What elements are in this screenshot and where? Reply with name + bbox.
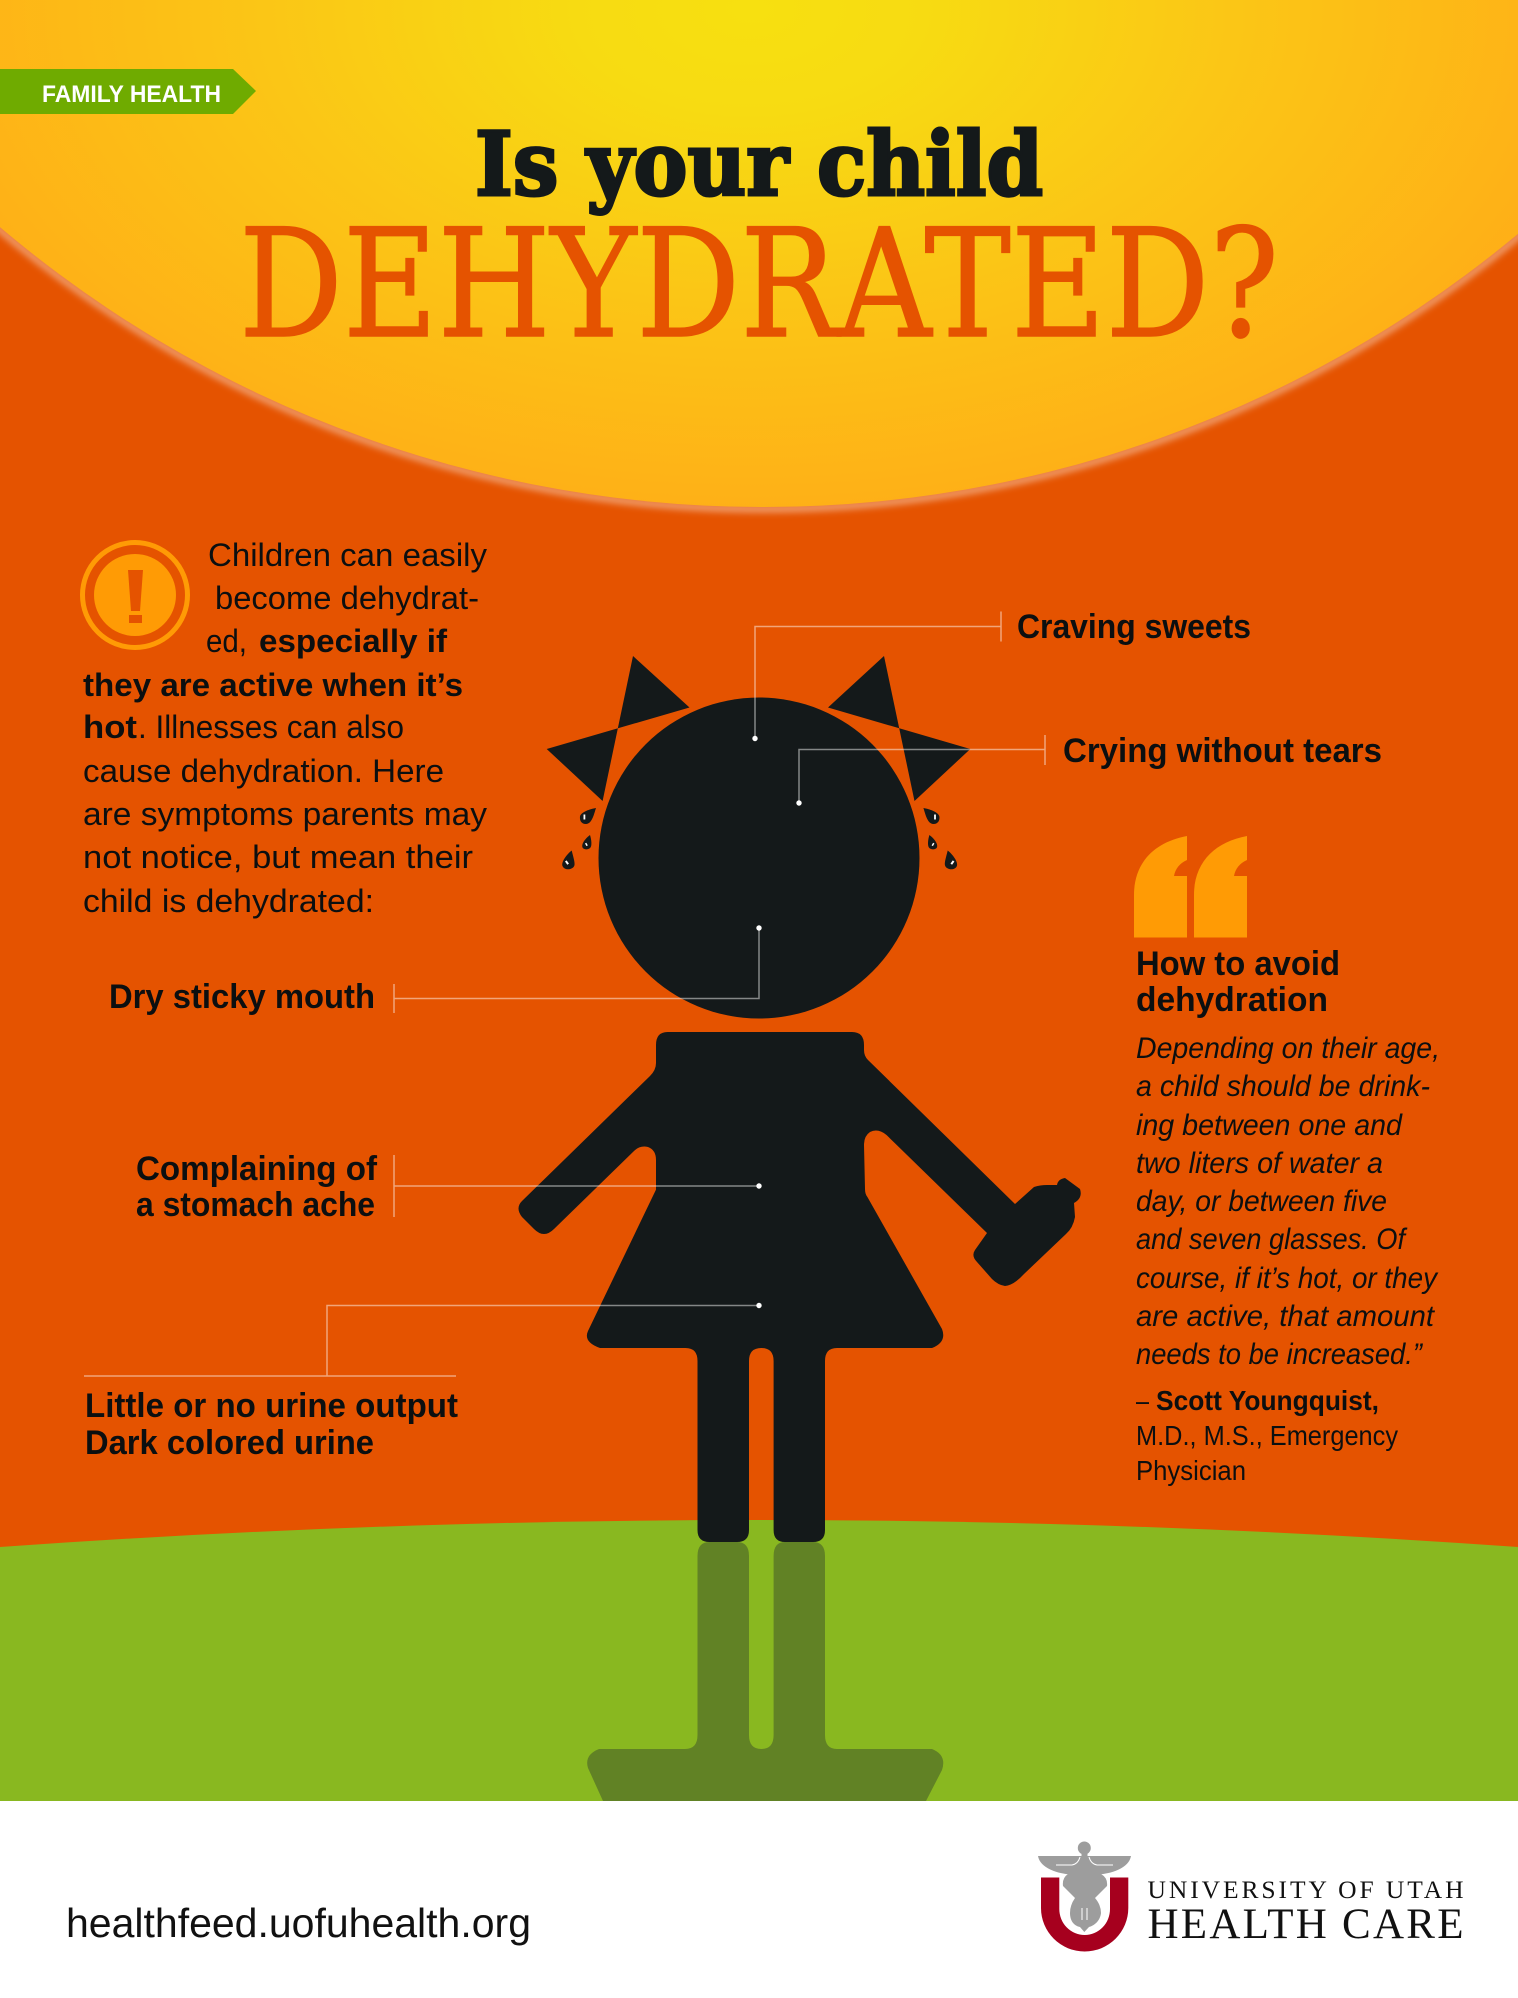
quote body — [1136, 1032, 1440, 1371]
icon: red U — [1041, 1878, 1128, 1952]
head — [598, 698, 920, 1018]
hair bow left — [547, 656, 690, 801]
callout: stomach ache: Complaining of — [136, 1150, 378, 1188]
tear drops left — [562, 808, 596, 869]
icon: caduceus — [1038, 1842, 1131, 1932]
quote attribution: M.D., M.S., Emergency — [1136, 1420, 1398, 1451]
green ground — [0, 1520, 1518, 1801]
sun glow edge — [0, 0, 1518, 509]
callout: crying without tears — [796, 732, 1382, 806]
intro text: cause dehydration. Here — [83, 753, 444, 789]
quote body: Depending on their age, — [1136, 1032, 1440, 1065]
callout: urine: Dark colored urine — [85, 1424, 374, 1462]
title: Is your child — [475, 112, 1043, 216]
callout: craving sweets — [752, 608, 1251, 741]
callout: dry sticky mouth — [109, 925, 762, 1016]
quote body: course, if it’s hot, or they — [1136, 1262, 1439, 1295]
quote heading — [1136, 945, 1340, 1019]
quote attribution — [1136, 1385, 1398, 1486]
quote body: two liters of water a — [1136, 1147, 1383, 1180]
quote heading: dehydration — [1136, 981, 1328, 1019]
intro text — [83, 537, 487, 919]
logo: university of utah health care — [1038, 1842, 1464, 1952]
quote heading: How to avoid — [1136, 945, 1340, 983]
quote attribution: – — [1136, 1385, 1149, 1416]
intro text: not notice, but mean their — [83, 839, 473, 875]
title — [239, 112, 1279, 372]
icon: warning — [82, 542, 188, 648]
banner: family health: FAMILY HEALTH — [42, 81, 221, 108]
intro panel — [82, 537, 487, 919]
panel: how to avoid dehydration — [1134, 836, 1440, 1486]
intro text: become dehydrat- — [215, 580, 479, 616]
quote body: needs to be increased.” — [1136, 1338, 1424, 1371]
intro text: hot — [83, 709, 137, 745]
callout: urine — [84, 1303, 762, 1462]
website url: healthfeed.uofuhealth.org — [66, 1900, 531, 1946]
tear drops right — [923, 808, 957, 869]
intro text: especially if — [259, 623, 447, 659]
intro text: Children can easily — [208, 537, 487, 573]
logo text: UNIVERSITY OF UTAH — [1148, 1875, 1464, 1904]
intro text: . Illnesses can also — [138, 709, 404, 745]
quote body: a child should be drink- — [1136, 1070, 1430, 1103]
callout: stomach ache: a stomach ache — [136, 1186, 375, 1224]
quote body: are active, that amount — [1136, 1300, 1436, 1333]
child silhouette — [518, 656, 1081, 1542]
quote body: day, or between five — [1136, 1185, 1387, 1218]
callout: urine: Little or no urine output — [85, 1387, 458, 1425]
child shadow — [587, 1542, 943, 1801]
icon: quotation marks — [1134, 836, 1247, 938]
white footer band — [0, 1801, 1518, 1998]
intro text: they are active when it’s — [83, 667, 463, 703]
intro text: ed, — [206, 623, 247, 659]
callout: craving sweets: Craving sweets — [1017, 608, 1251, 646]
title: DEHYDRATED? — [239, 198, 1279, 372]
callout: dry sticky mouth: Dry sticky mouth — [109, 978, 375, 1016]
banner: family health — [0, 69, 256, 114]
quote attribution: Scott Youngquist, — [1156, 1385, 1379, 1416]
hair bow right — [828, 656, 970, 801]
callout: stomach ache — [136, 1150, 762, 1224]
sun — [0, 0, 1518, 507]
intro text: child is dehydrated: — [83, 883, 374, 919]
quote body: ing between one and — [1136, 1109, 1403, 1142]
intro text: are symptoms parents may — [83, 796, 487, 832]
logo text — [1148, 1875, 1464, 1948]
body with arms, bottle and legs — [518, 1032, 1081, 1542]
quote attribution: Physician — [1136, 1455, 1246, 1486]
caduceus highlights — [1056, 1857, 1113, 1920]
logo text: HEALTH CARE — [1148, 1901, 1464, 1948]
callout: crying without tears: Crying without tears — [1063, 732, 1382, 770]
quote body: and seven glasses. Of — [1136, 1223, 1407, 1256]
